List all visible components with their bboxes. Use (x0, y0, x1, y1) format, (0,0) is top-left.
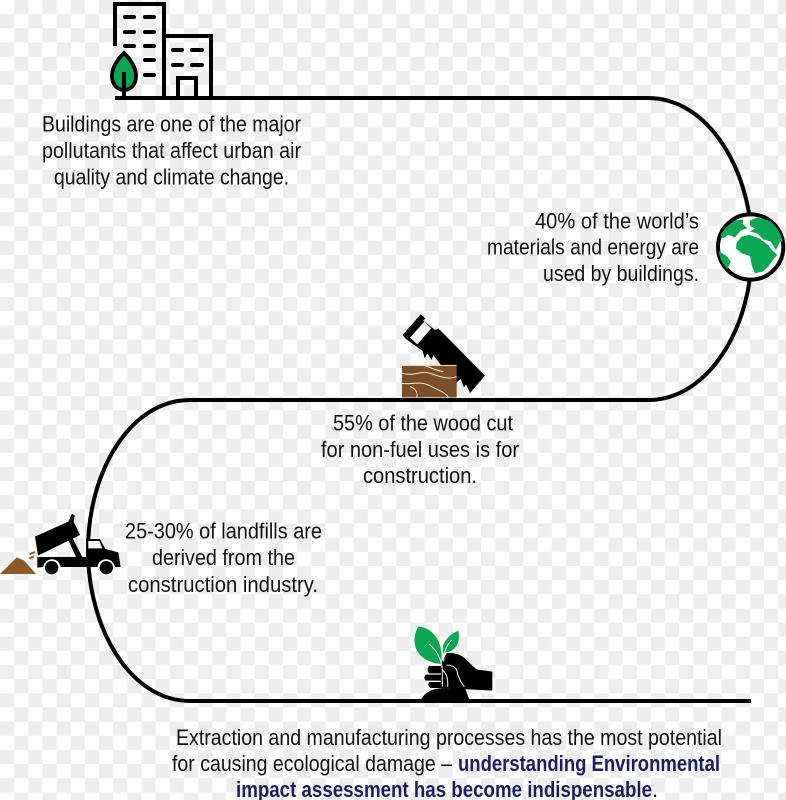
text: landfills (125, 518, 322, 597)
text: 40 percent: materials and energy are (487, 234, 699, 260)
icon: hand holding plant (414, 627, 492, 701)
winding path line (88, 98, 752, 701)
text: buildings pollutants: quality and climate change. (54, 164, 289, 190)
text: wood: 55% of the wood cut (333, 410, 513, 436)
text: 40 percent: used by buildings. (543, 261, 699, 286)
text: conclusion: understanding Environmental (458, 751, 720, 776)
text: buildings pollutants: Buildings are one of the major (42, 112, 301, 136)
text: landfills: derived from the (152, 545, 295, 570)
icon: saw and wood (402, 314, 485, 397)
icon: globe (717, 214, 785, 280)
text: buildings pollutants (42, 112, 301, 190)
icon: dump truck (0, 514, 121, 576)
text: wood: for non-fuel uses is for (321, 437, 519, 462)
text: buildings pollutants: pollutants that affect urban air (42, 138, 301, 163)
text: 40 percent: 40% of the world’s (535, 208, 699, 234)
text: conclusion (172, 725, 722, 800)
text: 40 percent (487, 208, 699, 286)
text: landfills: construction industry. (128, 572, 318, 597)
icon: buildings with tree (112, 4, 211, 98)
text: landfills: 25-30% of landfills are (125, 518, 322, 544)
text: conclusion: for causing ecological damage – (172, 751, 453, 776)
text: wood (321, 410, 519, 488)
text: conclusion: Extraction and manufacturing processes has the most potential (176, 725, 722, 750)
text: wood: construction. (363, 463, 477, 488)
